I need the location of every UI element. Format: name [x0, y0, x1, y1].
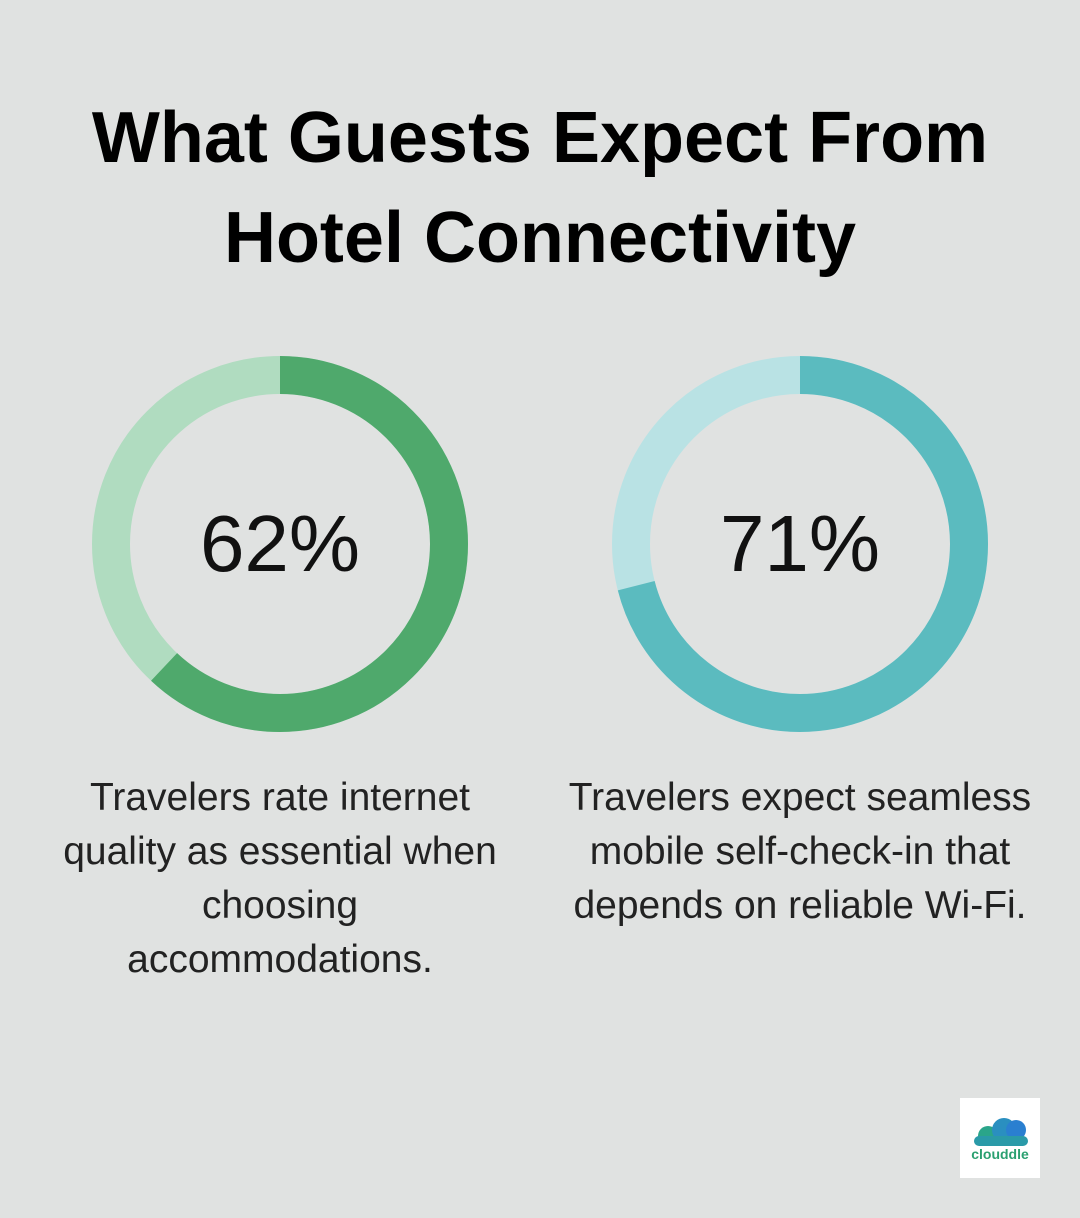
caption right: mobile self-check-in that [590, 830, 1010, 873]
caption left [63, 776, 497, 981]
logo [960, 1098, 1040, 1178]
title: Hotel Connectivity [224, 198, 856, 278]
donut: 71%: 71% [720, 499, 880, 588]
caption left: accommodations. [127, 938, 433, 981]
caption left: Travelers rate internet [90, 776, 470, 819]
title [92, 98, 988, 278]
caption left: choosing [202, 884, 358, 927]
donut: 62%: 62% [200, 499, 360, 588]
donut: 62% [92, 356, 468, 732]
logo: clouddle [971, 1146, 1029, 1162]
caption right: depends on reliable Wi-Fi. [573, 884, 1027, 927]
caption right [569, 776, 1031, 927]
title: What Guests Expect From [92, 98, 988, 178]
caption left: quality as essential when [63, 830, 497, 873]
donut: 71% [612, 356, 988, 732]
caption right: Travelers expect seamless [569, 776, 1031, 819]
